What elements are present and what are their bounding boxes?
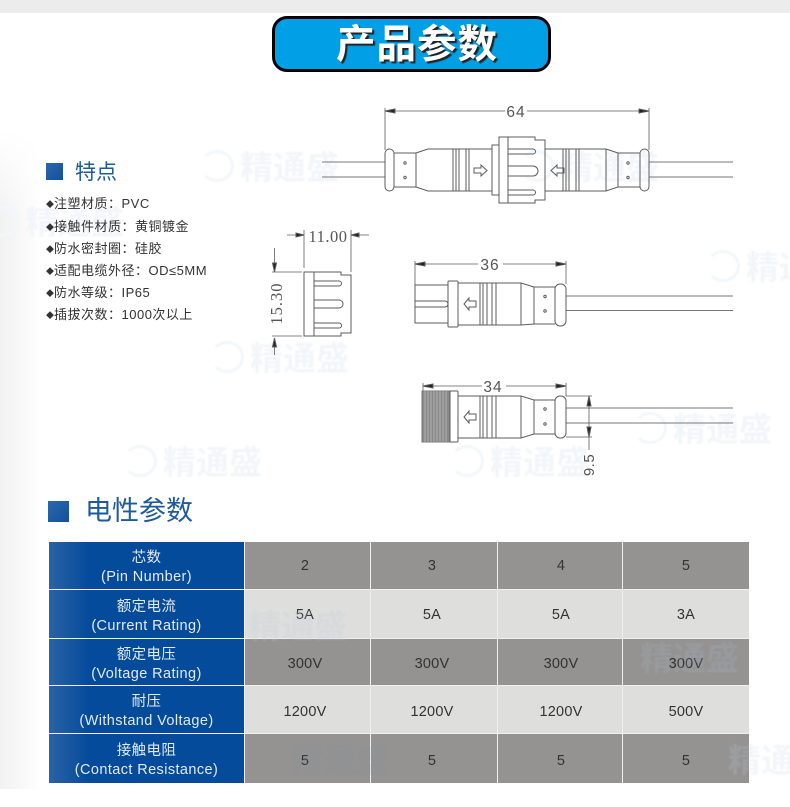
watermark: 精通盛 [560,149,659,186]
feature list: ◆ [46,267,54,276]
drawing: male plug, 36 mm: 36 [480,257,500,274]
row: withstand voltage: 1200V [411,704,453,720]
watermark: 精通盛 [673,411,772,448]
drawing: mated connector, 64 mm [322,104,733,203]
row: current rating: 3A [677,607,695,623]
watermark: 精通盛 [25,204,124,241]
feature list: ◆ [46,200,54,209]
heading: features: 特点 [75,161,117,184]
row: pin number: 4 [557,558,565,574]
feature list: 注塑材质：PVC [54,196,150,211]
row: withstand voltage: 1200V [540,704,582,720]
row: voltage rating: 300V [544,656,578,672]
drawing: threaded connector, 34 mm and 9.5 mm [422,379,733,476]
row: withstand voltage: (Withstand Voltage) [79,713,214,729]
feature list: 防水等级：IP65 [54,285,150,300]
row: withstand voltage [49,686,749,733]
row: current rating: (Current Rating) [91,618,202,634]
row: pin number: 芯数 [132,550,161,566]
row: voltage rating: 300V [288,656,322,672]
feature list: ◆ [46,245,54,254]
table watermark: 精通盛 [290,742,389,779]
feature list: ◆ [46,223,54,232]
drawing: end cap, 11.00 x 15.30: 11.00 [308,227,348,246]
row: contact resistance: 5 [557,752,565,768]
row: current rating: 5A [423,607,441,623]
row: voltage rating [49,639,749,685]
feature list: 接触件材质：黄铜镀金 [54,219,189,234]
table watermark: 精通盛 [640,640,739,677]
feature list: 防水密封圈：硅胶 [54,241,162,256]
feature list [46,196,207,322]
row: contact resistance: 5 [428,752,436,768]
technical drawings [267,104,733,476]
heading: features [46,161,117,184]
top grey band [0,0,790,13]
row: pin number [49,542,749,589]
left edge shading [0,184,18,789]
row: current rating: 5A [296,607,314,623]
row: voltage rating: 额定电压 [117,646,176,662]
feature list: 适配电缆外径：OD≤5MM [54,263,207,278]
heading: electrical parameters: 电性参数 [85,496,193,526]
row: contact resistance: (Contact Resistance) [75,762,218,778]
row: contact resistance: 5 [682,752,690,768]
row: withstand voltage: 500V [669,704,703,720]
watermark: 精通盛 [163,444,262,481]
table watermark: 精通盛 [248,608,347,645]
row: withstand voltage: 耐压 [132,694,161,710]
drawing: threaded connector, 34 mm and 9.5 mm: 34 [483,379,503,396]
drawing: male plug, 36 mm [415,257,733,327]
row: pin number: 2 [301,558,309,574]
drawing: end cap, 11.00 x 15.30 [267,227,369,355]
row: pin number: 3 [428,558,436,574]
title button [272,16,551,72]
row: current rating [49,590,749,638]
watermark: 精通盛 [250,340,349,377]
watermark: 精通盛 [240,149,339,186]
row: current rating: 额定电流 [117,598,176,614]
row: voltage rating: 300V [415,656,449,672]
row: contact resistance: 接触电阻 [117,743,176,759]
row: current rating: 5A [552,607,570,623]
electrical parameters table [49,542,749,783]
title button: 产品参数 [336,23,498,67]
row: contact resistance [49,734,749,783]
drawing: mated connector, 64 mm: 64 [506,104,526,121]
drawing: end cap, 11.00 x 15.30: 15.30 [267,282,286,325]
row: pin number: 5 [682,558,690,574]
row: withstand voltage: 1200V [284,704,326,720]
row: voltage rating: 300V [669,656,703,672]
feature list: ◆ [46,311,54,320]
watermark [712,249,790,286]
drawing: threaded connector, 34 mm and 9.5 mm: 9.5 [581,454,598,476]
feature list: 插拔次数：1000次以上 [54,307,193,322]
feature list: ◆ [46,289,54,298]
row: contact resistance: 5 [301,752,309,768]
row: pin number: (Pin Number) [101,569,192,585]
watermark: 精通盛 [490,444,589,481]
row: voltage rating: (Voltage Rating) [91,666,202,682]
